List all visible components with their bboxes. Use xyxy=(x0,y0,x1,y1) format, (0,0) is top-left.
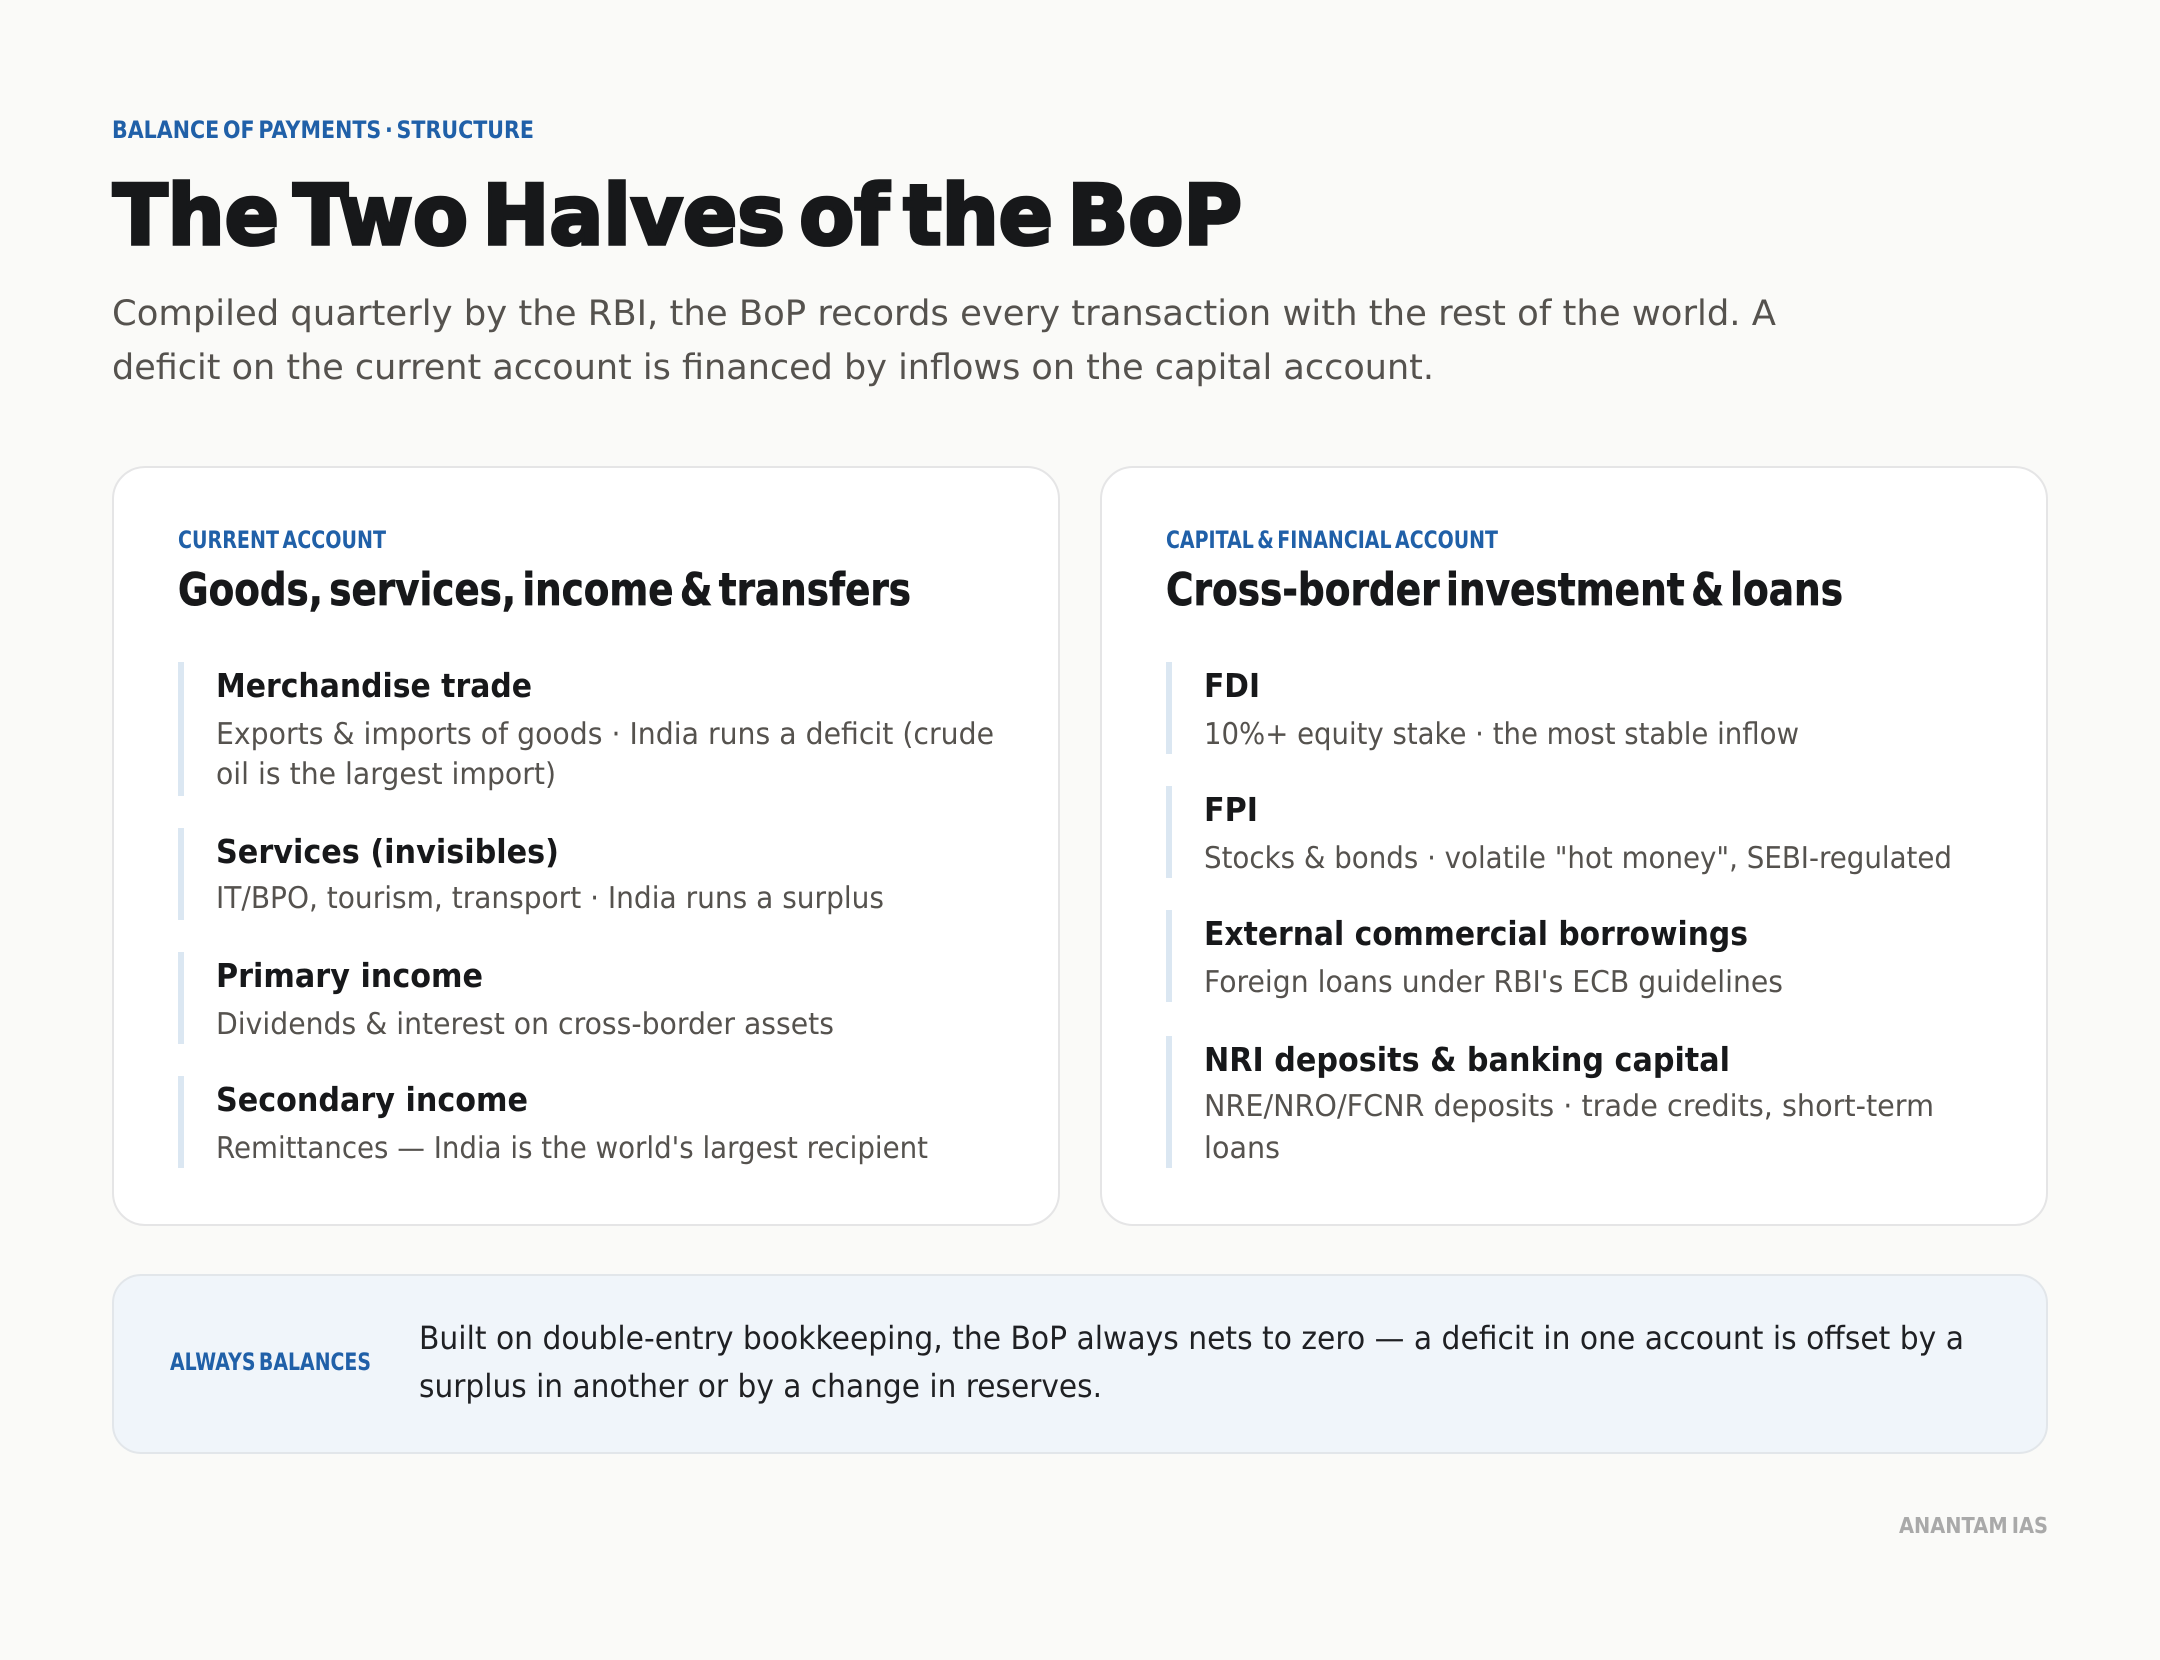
panel label: capital and financial account: CAPITAL & FINANCIAL ACCOUNT xyxy=(1166,526,1498,554)
item: merchandise trade: oil is the largest import) xyxy=(216,757,556,792)
item: external commercial borrowings xyxy=(1166,910,1783,1002)
item: merchandise trade: Merchandise trade xyxy=(216,666,532,705)
item: services: IT/BPO, tourism, transport · India runs a surplus xyxy=(216,881,884,916)
item: NRI deposits and banking capital: NRI deposits & banking capital xyxy=(1204,1040,1730,1079)
title: The Two Halves of the BoP xyxy=(113,167,1242,264)
item: FPI: Stocks & bonds · volatile "hot money", SEBI-regulated xyxy=(1204,841,1952,876)
footer credit: ANANTAM IAS xyxy=(1899,1514,2048,1539)
panel: capital and financial account xyxy=(1101,467,2047,1225)
item: NRI deposits and banking capital xyxy=(1166,1036,1934,1168)
item: external commercial borrowings: External commercial borrowings xyxy=(1204,914,1748,953)
item: NRI deposits and banking capital: NRE/NRO/FCNR deposits · trade credits, short-term xyxy=(1204,1089,1934,1124)
item: merchandise trade xyxy=(178,662,994,796)
item: services: Services (invisibles) xyxy=(216,832,559,871)
subtitle xyxy=(112,294,1776,388)
callout text: surplus in another or by a change in reserves. xyxy=(419,1367,1102,1405)
item: primary income: Dividends & interest on cross-border assets xyxy=(216,1007,834,1042)
item: FPI: FPI xyxy=(1204,790,1258,829)
panel: current account xyxy=(113,467,1059,1225)
subtitle: Compiled quarterly by the RBI, the BoP records every transaction with the rest of the world. A xyxy=(112,294,1776,334)
item: merchandise trade: Exports & imports of goods · India runs a deficit (crude xyxy=(216,717,994,752)
callout: always balances xyxy=(113,1275,2047,1453)
item: secondary income: Remittances — India is the world's largest recipient xyxy=(216,1131,928,1166)
panel heading: goods, services, income and transfers: Goods, services, income & transfers xyxy=(178,563,911,616)
item: secondary income: Secondary income xyxy=(216,1080,528,1119)
item: secondary income xyxy=(178,1076,928,1168)
subtitle: deficit on the current account is financed by inflows on the capital account. xyxy=(112,348,1434,388)
callout text xyxy=(419,1319,1964,1405)
item: services xyxy=(178,828,884,920)
item: FPI xyxy=(1166,786,1952,878)
item: NRI deposits and banking capital: loans xyxy=(1204,1131,1280,1166)
item: external commercial borrowings: Foreign loans under RBI's ECB guidelines xyxy=(1204,965,1783,1000)
item: FDI xyxy=(1166,662,1799,754)
item: FDI: FDI xyxy=(1204,666,1260,705)
callout label: ALWAYS BALANCES xyxy=(170,1348,371,1376)
panel heading: cross-border investment and loans: Cross-border investment & loans xyxy=(1166,563,1843,616)
item: FDI: 10%+ equity stake · the most stable inflow xyxy=(1204,717,1799,752)
eyebrow: BALANCE OF PAYMENTS · STRUCTURE xyxy=(112,116,534,144)
panel label: current account: CURRENT ACCOUNT xyxy=(178,526,386,554)
item: primary income xyxy=(178,952,834,1044)
item: primary income: Primary income xyxy=(216,956,483,995)
callout text: Built on double-entry bookkeeping, the BoP always nets to zero — a deficit in one account is offset by a xyxy=(419,1319,1964,1357)
